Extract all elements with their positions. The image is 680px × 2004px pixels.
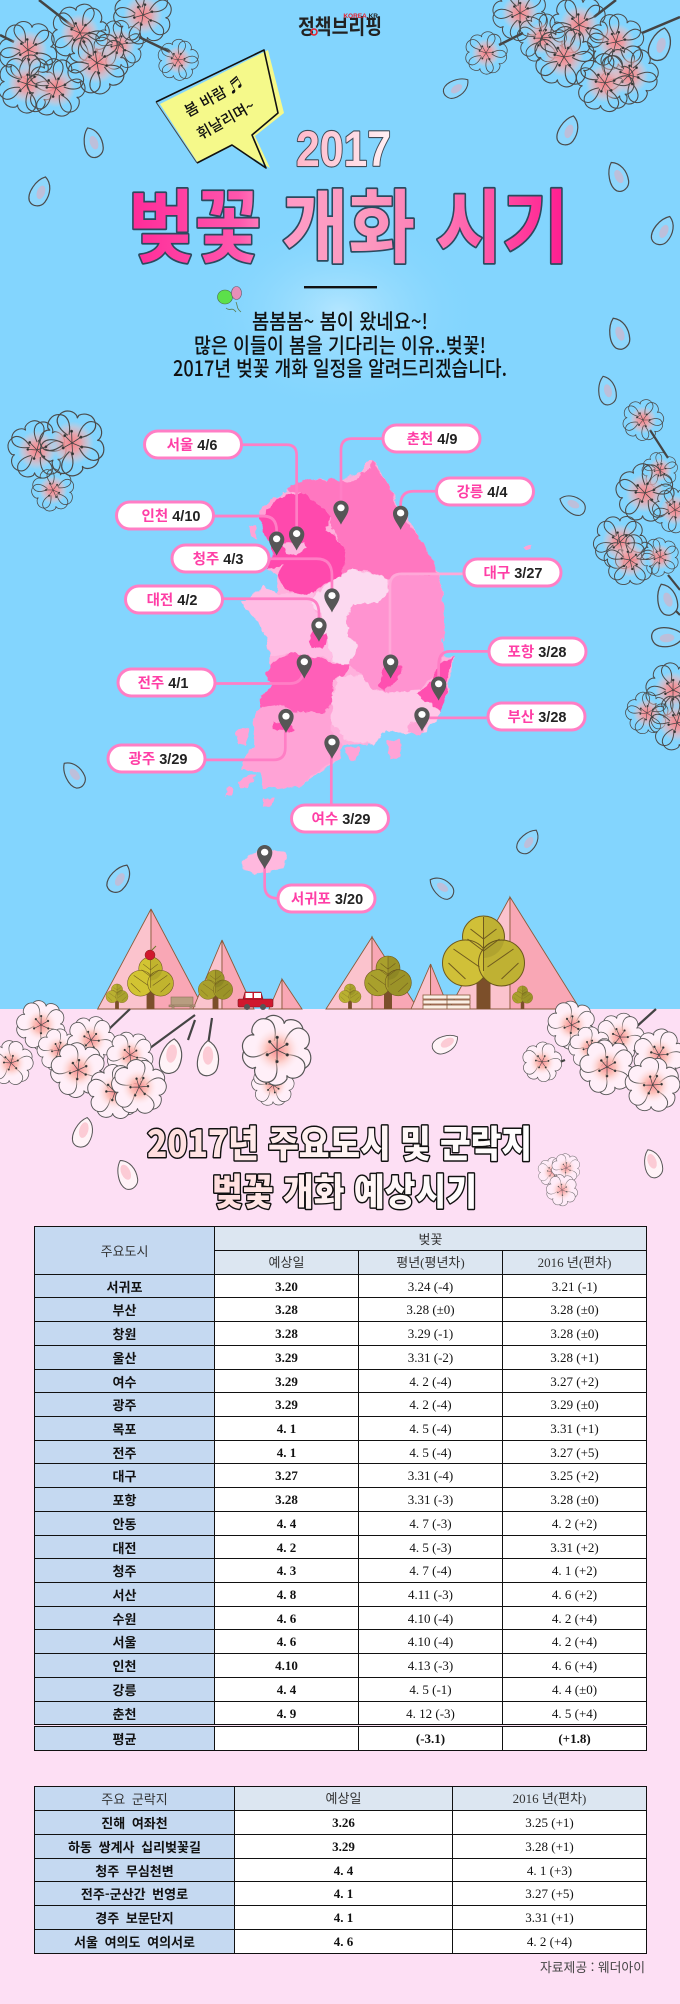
table: major cities forecast: 4. 2 (+4) [552, 1634, 597, 1649]
table: major cities forecast: 4. 5 (-3) [409, 1540, 452, 1554]
region: Incheon coast [259, 497, 284, 521]
table: blossom spots forecast: 3.31 (+1) [525, 1910, 574, 1925]
speech bubble: 휘날리며~ [193, 95, 259, 144]
flowers: top right branch [458, 0, 680, 126]
table: blossom spots forecast: 4. 6 [334, 1934, 353, 1949]
region: Busan [406, 722, 428, 735]
table: average row: 평균 [113, 1729, 136, 1748]
table: major cities forecast: 3.31 (+1) [550, 1421, 599, 1436]
table: major cities forecast: 4.10 (-4) [408, 1634, 453, 1649]
region: Gyeongbuk [347, 574, 445, 693]
table: blossom spots forecast: 경주 보문단지 [95, 1908, 174, 1927]
table: major cities forecast: 포항 [113, 1490, 136, 1509]
region: Daegu [378, 667, 402, 691]
table: major cities forecast: 4. 4 [277, 1516, 296, 1531]
table: major cities forecast: 창원 [113, 1324, 136, 1343]
source credit: 자료제공 : 웨더아이 [540, 1957, 645, 1976]
label: Busan [488, 703, 585, 730]
table: major cities forecast: 3.31 (-4) [408, 1468, 453, 1483]
label: Daegu: 대구 3/27 [484, 562, 542, 583]
background glow [200, 212, 480, 412]
table: major cities forecast: 예상일 [269, 1255, 304, 1270]
label: Pohang: 포항 3/28 [508, 641, 566, 662]
table: major cities forecast: 4. 2 (+4) [552, 1610, 597, 1626]
falling petals: pink section [70, 1030, 666, 1192]
region: mainland silhouette [240, 459, 453, 789]
label: Gwangju [108, 745, 205, 772]
table: blossom spots forecast: 3.27 (+5) [525, 1886, 574, 1901]
label: Pohang [489, 638, 586, 665]
table: major cities forecast: 3.28 (±0) [550, 1326, 599, 1341]
speech bubble: 봄 바람 ♬ [180, 72, 247, 121]
table: major cities forecast [34, 1226, 647, 1725]
table: major cities forecast: 4. 2 (-4) [409, 1397, 452, 1412]
title divider [304, 286, 377, 288]
table: major cities forecast: 4.10 (-4) [408, 1610, 453, 1626]
icon: bench right [423, 995, 470, 1009]
section heading [147, 1114, 532, 1216]
icon: red car [238, 992, 273, 1010]
table: major cities forecast: 4. 5 (-4) [409, 1421, 452, 1436]
table: major cities forecast: 3.28 [275, 1326, 298, 1341]
table: major cities forecast: 강릉 [113, 1680, 136, 1699]
table: major cities forecast: 4. 1 [277, 1421, 296, 1436]
label: Yeosu [292, 805, 388, 832]
label: Incheon [116, 502, 214, 529]
table: major cities forecast: 대전 [113, 1538, 136, 1556]
table: major cities forecast: 4. 1 (+2) [552, 1563, 597, 1578]
table: major cities forecast: 전주 [113, 1442, 136, 1462]
flowers: top left branch [0, 0, 207, 132]
table: major cities forecast: 서산 [113, 1585, 136, 1604]
table: major cities forecast: 3.31 (-2) [408, 1350, 453, 1365]
table: average row: (+1.8) [558, 1731, 591, 1746]
table: major cities forecast: 4. 2 (+2) [552, 1516, 597, 1531]
leader lines [206, 439, 488, 898]
table: major cities forecast: 3.28 (±0) [550, 1492, 599, 1507]
table: major cities forecast: 3.31 (-3) [408, 1492, 453, 1507]
table: major cities forecast: 4. 2 [277, 1540, 296, 1554]
table: major cities forecast: 청주 [113, 1561, 136, 1580]
table: major cities forecast: 3.29 [275, 1397, 298, 1412]
table: major cities forecast: 3.27 (+2) [550, 1374, 599, 1388]
table: major cities forecast: 목포 [113, 1419, 136, 1438]
table: major cities forecast: 4. 8 [277, 1587, 296, 1602]
label: Cheongju: 청주 4/3 [193, 548, 243, 569]
map regions [225, 459, 532, 877]
region: Ulsan and Pohang [417, 657, 453, 712]
table: major cities forecast: 서귀포 [107, 1276, 142, 1296]
table: major cities forecast: 4. 3 [277, 1563, 296, 1578]
table: major cities forecast: 3.29 (-1) [408, 1326, 453, 1341]
logo: 정책브리핑 [298, 11, 382, 41]
flower: small pink bloom [533, 1150, 585, 1210]
table: major cities forecast: 3.29 [275, 1350, 298, 1365]
table: major cities forecast: 4. 6 [277, 1634, 296, 1649]
table: average row: (-3.1) [416, 1731, 445, 1746]
table: blossom spots forecast: 예상일 [326, 1791, 361, 1806]
table: blossom spots forecast: 3.28 (+1) [525, 1839, 574, 1854]
table: major cities forecast: 벚꽃 [419, 1229, 442, 1248]
label: Busan: 부산 3/28 [508, 706, 566, 727]
table: blossom spots forecast: 3.25 (+1) [525, 1815, 574, 1830]
table: major cities forecast: 3.28 (±0) [406, 1302, 455, 1317]
logo: KOREA.KR [343, 13, 378, 20]
table: major cities forecast: 인천 [113, 1656, 136, 1675]
region: Gyeonggi and Chungnam north [260, 493, 345, 594]
region: Jeonbuk [259, 653, 349, 714]
table: blossom spots forecast: 서울 여의도 여의서로 [74, 1932, 195, 1951]
city labels [108, 425, 586, 912]
label: Gwangju: 광주 3/29 [129, 748, 187, 769]
table: blossom spots forecast: 4. 2 (+4) [527, 1934, 572, 1949]
table: major cities forecast: 4.11 (-3) [408, 1587, 453, 1602]
table: blossom spots forecast: 4. 4 [334, 1862, 353, 1878]
title: 2017: 2017 [296, 121, 391, 177]
table: major cities forecast: 3.21 (-1) [552, 1278, 597, 1294]
region: Gwangju [273, 720, 294, 732]
label: Seogwipo [278, 885, 375, 912]
map of South Korea [206, 439, 532, 898]
icon: bench left [169, 997, 195, 1009]
landscape: trees [106, 916, 533, 1009]
map pins [257, 501, 446, 869]
region: Gangwon [287, 459, 437, 579]
region: Seoul [283, 543, 306, 555]
landscape: mountains [98, 897, 580, 1009]
table: blossom spots forecast: 청주 무심천변 [95, 1860, 174, 1880]
table: blossom spots forecast: 2016 년(편차) [513, 1791, 586, 1806]
table: major cities forecast: 3.24 (-4) [408, 1278, 453, 1294]
intro text [173, 306, 507, 383]
region: Jeonnam [240, 703, 343, 789]
table: major cities forecast: 여수 [113, 1372, 136, 1390]
table: major cities forecast: 춘천 [113, 1704, 136, 1722]
region: Jeju [239, 846, 290, 877]
table: major cities forecast: 3.28 [275, 1492, 298, 1507]
label: Gangneung [436, 478, 534, 505]
table: major cities forecast: 4. 7 (-4) [409, 1563, 452, 1578]
label: Seogwipo: 서귀포 3/20 [291, 888, 363, 909]
table: major cities forecast: 3.25 (+2) [550, 1468, 599, 1483]
table: major cities forecast: 4. 7 (-3) [409, 1516, 452, 1531]
region: Daejeon [309, 632, 327, 648]
label: Daejeon [126, 586, 222, 613]
background: pink section [0, 1009, 680, 2004]
label: Chuncheon [383, 425, 480, 452]
label: Seoul: 서울 4/6 [167, 434, 217, 455]
table: major cities forecast: 4. 1 [277, 1444, 296, 1460]
table: major cities forecast: 수원 [113, 1608, 136, 1628]
table: major cities forecast: 3.29 [275, 1374, 298, 1388]
table: major cities forecast: 3.27 [275, 1468, 298, 1483]
table: major cities forecast: 서울 [113, 1632, 136, 1651]
table: major cities forecast: 3.28 (±0) [550, 1302, 599, 1317]
table: blossom spots forecast: 전주-군산간 번영로 [81, 1884, 188, 1903]
flowers: right side cluster [591, 397, 680, 765]
table: major cities forecast: 대구 [113, 1466, 136, 1485]
table: major cities forecast: 4. 6 (+2) [552, 1587, 597, 1602]
table: blossom spots forecast: 3.26 [332, 1815, 355, 1830]
table: major cities forecast: 4. 9 [277, 1706, 296, 1720]
label: Gangneung: 강릉 4/4 [457, 481, 507, 502]
flower: pink section large bloom [230, 1008, 323, 1105]
table: major cities forecast: 4. 6 [277, 1610, 296, 1626]
section heading: 2017년 주요도시 및 군락지 [147, 1114, 532, 1168]
table: blossom spots forecast: 4. 1 (+3) [527, 1862, 572, 1878]
table: blossom spots forecast: 하동 쌍계사 십리벚꽃길 [68, 1837, 201, 1856]
table: major cities forecast: 4. 12 (-3) [406, 1706, 455, 1720]
label: Seoul [144, 431, 242, 458]
title: cherry blossom bloom period: 벚꽃 개화 시기 [128, 164, 569, 280]
table: major cities forecast: 4. 5 (+4) [552, 1706, 597, 1720]
table: blossom spots forecast: 주요 군락지 [101, 1789, 168, 1808]
label: Yeosu: 여수 3/29 [312, 808, 370, 829]
intro text: 봄봄봄~ 봄이 왔네요~! [252, 306, 428, 336]
flowers: left side cluster [0, 405, 113, 514]
region: Chungnam [242, 586, 332, 660]
section heading: 벚꽃 개화 예상시기 [212, 1162, 477, 1216]
flowers: pink section right branch [515, 995, 680, 1128]
table: major cities forecast: 3.28 [275, 1302, 298, 1317]
table: blossom spots forecast: 진해 여좌천 [101, 1813, 168, 1832]
label: Jeonju: 전주 4/1 [138, 672, 188, 693]
flowers: pink section left branch [0, 995, 219, 1134]
region: Gyeongnam [332, 676, 440, 744]
table: major cities forecast: 안동 [113, 1514, 136, 1533]
table: major cities forecast: 평년(평년차) [396, 1255, 465, 1270]
table: major cities forecast: 4. 2 (-4) [409, 1374, 452, 1388]
background: sky section [0, 0, 680, 1010]
label: Cheongju [172, 545, 269, 572]
table: major cities forecast: 4. 5 (-4) [409, 1444, 452, 1460]
table: major cities forecast: 3.27 (+5) [550, 1444, 599, 1460]
table: major cities forecast: 4. 5 (-1) [409, 1682, 452, 1697]
table: major cities forecast: 4. 4 (±0) [552, 1682, 597, 1697]
label: Daejeon: 대전 4/2 [147, 589, 197, 610]
speech bubble [156, 50, 284, 168]
intro text: 2017년 벚꽃 개화 일정을 알려드리겠습니다. [173, 353, 507, 383]
label: Chuncheon: 춘천 4/9 [407, 428, 457, 449]
table: major cities forecast: 3.20 [275, 1278, 298, 1294]
label: Jeonju [118, 669, 215, 696]
table: blossom spots forecast: 4. 1 [334, 1910, 353, 1925]
table: average row [34, 1726, 647, 1751]
table: major cities forecast: 3.29 (±0) [550, 1397, 599, 1412]
falling petals: sky section [26, 73, 678, 902]
table: major cities forecast: 광주 [113, 1395, 136, 1414]
label: Daegu [464, 559, 561, 586]
islands [225, 526, 532, 806]
table: major cities forecast: 4.10 [275, 1658, 298, 1673]
table: major cities forecast: 4.13 (-3) [408, 1658, 453, 1673]
table: major cities forecast: 4. 6 (+4) [552, 1658, 597, 1673]
table: major cities forecast: 4. 4 [277, 1682, 296, 1697]
intro text: 많은 이들이 봄을 기다리는 이유..벚꽃! [194, 330, 486, 360]
label: Incheon: 인천 4/10 [142, 505, 200, 526]
region: Chungbuk [312, 569, 388, 665]
table: major cities forecast: 2016 년(편차) [538, 1255, 611, 1270]
table: major cities forecast: 3.31 (+2) [550, 1540, 599, 1554]
table: major cities forecast: 주요도시 [101, 1241, 148, 1260]
icon: balloons [218, 286, 242, 312]
table: major cities forecast: 울산 [113, 1348, 136, 1367]
table: major cities forecast: 3.28 (+1) [550, 1350, 599, 1365]
table: major cities forecast: 부산 [113, 1300, 136, 1319]
table: blossom spots forecast: 3.29 [332, 1839, 355, 1854]
table: blossom spots forecast [34, 1786, 647, 1954]
table: blossom spots forecast: 4. 1 [334, 1886, 353, 1901]
icon: cherry [145, 946, 156, 960]
